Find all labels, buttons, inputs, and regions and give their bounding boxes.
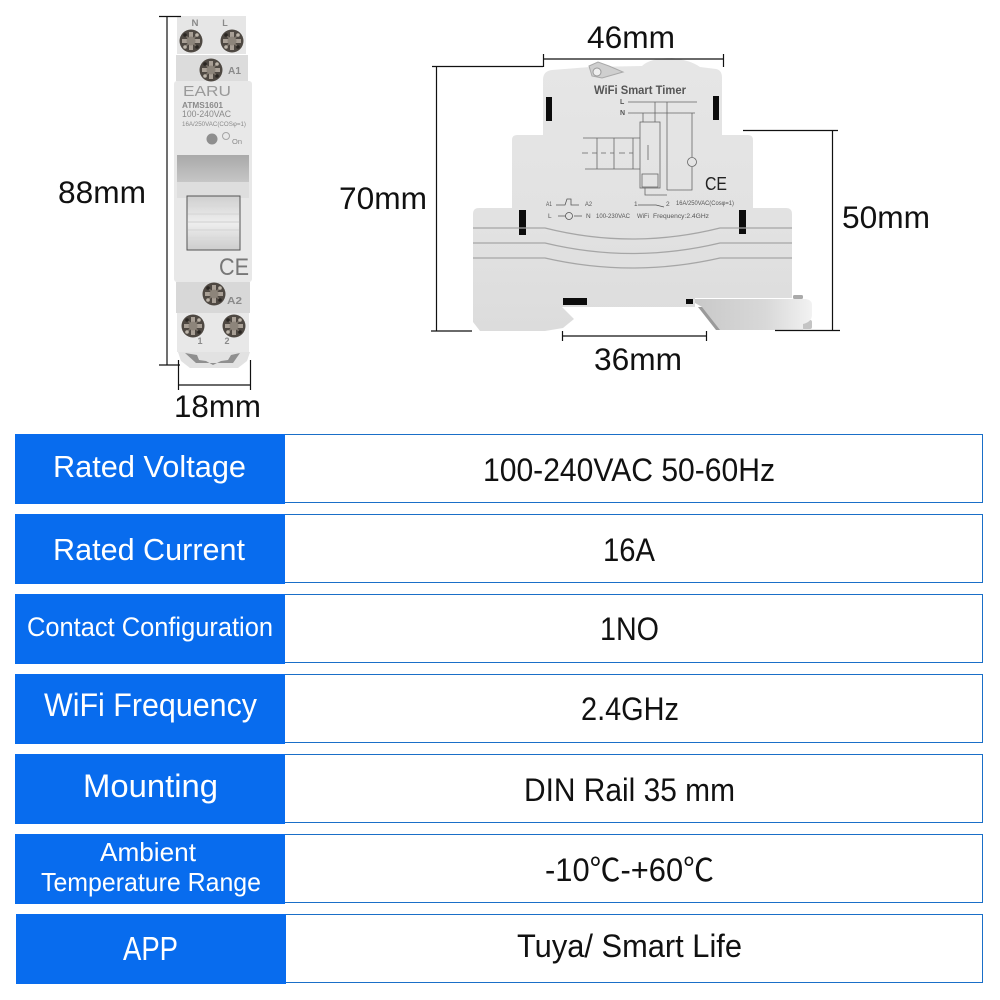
spec row: contact configuration: Contact Configuration xyxy=(27,612,273,642)
spec text: L xyxy=(548,213,552,220)
device labels: A1 xyxy=(228,66,241,77)
spec row: app: APP xyxy=(123,930,178,967)
device labels: 16A/250VAC(COSφ=1) xyxy=(182,121,246,128)
dimension: 36mm xyxy=(562,331,706,377)
dimension: 70mm: 70mm xyxy=(339,180,427,216)
dimension: 50mm: 50mm xyxy=(842,199,930,235)
device labels: EARU xyxy=(183,83,231,100)
dimension: 36mm: 36mm xyxy=(594,341,682,377)
dimension: 70mm xyxy=(339,66,543,331)
device labels: 100-240VAC xyxy=(182,109,231,119)
spec text: A2 xyxy=(585,201,592,208)
spec text: Frequency:2.4GHz xyxy=(653,213,709,220)
spec row: rated current xyxy=(15,514,982,584)
indicator light xyxy=(206,132,230,144)
device: side view: N xyxy=(620,110,625,117)
knob xyxy=(187,196,240,250)
dimension: 18mm: 18mm xyxy=(174,388,261,424)
device: side view: L xyxy=(620,99,625,106)
dimension: 88mm xyxy=(58,16,181,365)
spec text: A1 xyxy=(546,201,552,208)
spec row: ambient temperature range: -10℃-+60℃ xyxy=(545,852,714,888)
dimension: 46mm xyxy=(544,19,724,67)
CE mark: CE xyxy=(219,254,249,281)
device: side view xyxy=(473,58,812,331)
din clip xyxy=(178,352,250,368)
spec row: mounting: DIN Rail 35 mm xyxy=(524,772,735,808)
spec text: WiFi xyxy=(637,213,649,220)
title: WiFi Smart Timer xyxy=(594,85,687,97)
spec row: mounting xyxy=(15,754,982,824)
spec row: rated voltage xyxy=(15,434,982,504)
device: front view xyxy=(174,16,252,368)
spec row: mounting: Mounting xyxy=(83,768,218,804)
spec row: rated voltage: 100-240VAC 50-60Hz xyxy=(483,452,775,488)
spec text: N xyxy=(586,213,591,220)
spec text: 2 xyxy=(666,201,670,208)
CE mark: CE xyxy=(705,174,727,194)
device labels: 2 xyxy=(224,336,230,346)
spec row: rated voltage: Rated Voltage xyxy=(53,449,246,484)
spec row: app xyxy=(16,914,982,984)
dimension: 50mm xyxy=(743,130,930,330)
device labels: On xyxy=(232,139,242,146)
device labels xyxy=(182,18,246,346)
wiring diagram xyxy=(582,102,697,195)
spec row: ambient temperature range: Temperature Range xyxy=(41,867,261,897)
spec row: wifi frequency xyxy=(15,674,982,744)
screws xyxy=(180,30,246,338)
spec row: wifi frequency: 2.4GHz xyxy=(581,691,679,727)
spec row: wifi frequency: WiFi Frequency xyxy=(44,687,257,723)
spec text: 1 xyxy=(634,201,638,208)
dimension: 88mm: 88mm xyxy=(58,174,146,210)
din clip xyxy=(695,295,812,330)
spec text: 100-230VAC xyxy=(596,213,630,220)
device labels: L xyxy=(222,18,228,28)
spec row: contact configuration: 1NO xyxy=(600,611,659,647)
dimension: 46mm: 46mm xyxy=(587,19,675,55)
spec row: rated current: 16A xyxy=(603,532,656,568)
spec row: contact configuration xyxy=(15,594,982,664)
spec row: ambient temperature range xyxy=(15,834,982,904)
spec text xyxy=(546,200,734,220)
slots xyxy=(519,96,746,305)
spec text: 16A/250VAC(Cosφ=1) xyxy=(676,200,734,207)
spec row: app: Tuya/ Smart Life xyxy=(517,928,742,964)
spec row: rated current: Rated Current xyxy=(53,532,245,567)
spec row: ambient temperature range: Ambient xyxy=(100,837,197,867)
device labels: 1 xyxy=(197,336,203,346)
housing grooves xyxy=(473,228,792,268)
device labels: ATMS1601 xyxy=(182,101,224,110)
dimension: 18mm xyxy=(174,360,261,424)
device labels: N xyxy=(192,18,198,28)
housing xyxy=(473,58,792,331)
device labels: A2 xyxy=(227,296,242,307)
